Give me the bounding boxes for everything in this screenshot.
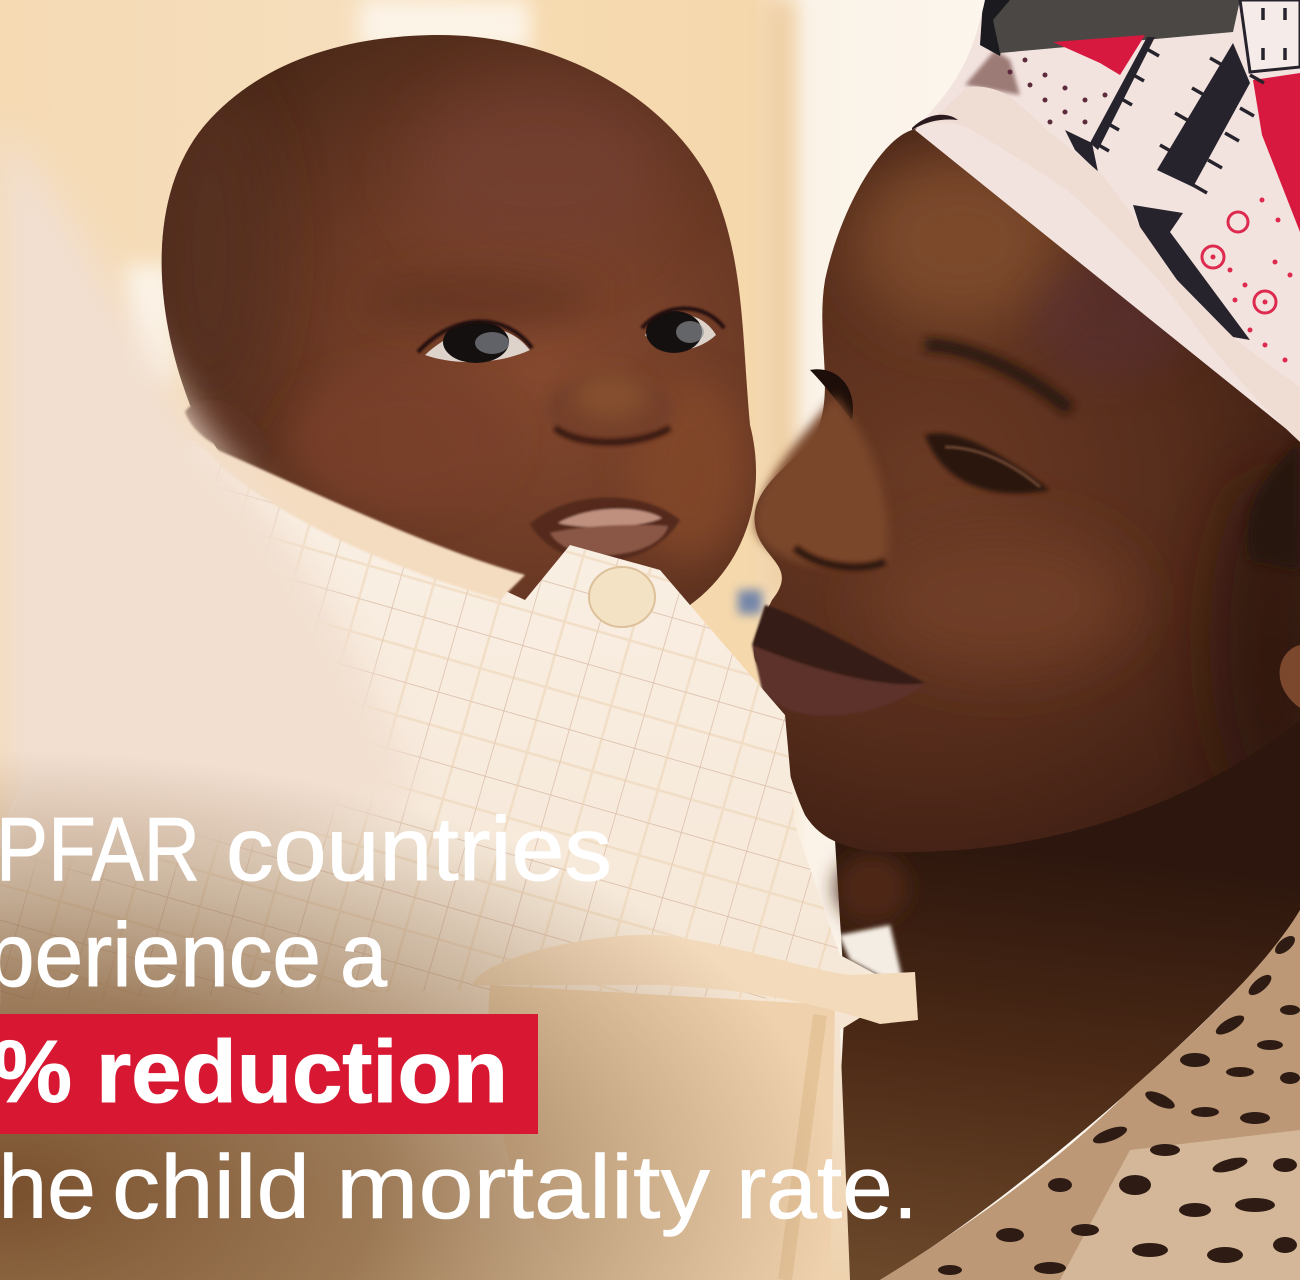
- scarf: black knot behind: [980, 0, 1010, 56]
- carrier strap detail under chin: [836, 854, 908, 922]
- headline line 1: PFAR: [0, 800, 200, 900]
- baby: nose: [546, 374, 674, 446]
- mother: closed eye: [925, 433, 1050, 493]
- headline line 4: mortality: [336, 1138, 710, 1238]
- mother: eyebrow: [925, 345, 1070, 410]
- baby: right eye: [642, 308, 724, 353]
- garment: white ruffle near neck: [825, 905, 905, 990]
- baby: ear: [185, 400, 272, 458]
- baby: mouth: [530, 498, 680, 561]
- scarf: black band at top: [993, 0, 1240, 53]
- headscarf: [900, 0, 1300, 442]
- scarf: red panels: [1053, 35, 1145, 75]
- scarf: pale folded band along forehead: [912, 87, 1300, 442]
- headline line 1: [0, 800, 612, 900]
- garment: pocket flap: [472, 935, 918, 1024]
- scarf: dotted panel: [1008, 58, 1108, 124]
- mother: neck: [830, 700, 1300, 1280]
- mother: lashes of far eye: [810, 369, 853, 420]
- scarf: teeth pattern: [1095, 8, 1285, 193]
- garment: pocket body: [488, 985, 835, 1280]
- headline line 2: a: [340, 906, 388, 1006]
- mother: ear: [1280, 645, 1300, 708]
- headline line 4: rate.: [736, 1138, 918, 1238]
- highlight text: reduction: [96, 1022, 508, 1121]
- garment: button: [589, 567, 655, 627]
- scarf: red ring motifs: [1202, 212, 1276, 313]
- mother: neck and face: [745, 110, 1300, 1280]
- baby: head and face: [162, 35, 756, 605]
- dark shading behind headline: [0, 740, 860, 1280]
- headline line 4: child: [112, 1138, 310, 1238]
- scarf: dark sliver at temple: [912, 115, 958, 130]
- mother: hairline: [1247, 440, 1300, 570]
- mother: lips: [752, 605, 925, 716]
- headline text block: [0, 800, 918, 1238]
- baby: left eye: [418, 321, 532, 363]
- headline line 4: [0, 1138, 918, 1238]
- scarf: pink scribble edge: [965, 50, 1020, 95]
- highlight bar: [0, 1014, 538, 1134]
- baby's garment: soft out-of-focus shoulder: [0, 130, 420, 880]
- baby's garment: plaid cloth: [0, 440, 918, 1280]
- mother's leopard-print blouse: [860, 900, 1300, 1280]
- mother: nose: [755, 395, 888, 567]
- scarf: white block at top right: [1240, 0, 1300, 72]
- headline line 1: countries: [226, 800, 612, 900]
- scarf: black stripes: [1090, 37, 1155, 150]
- scarf: dark corner under dotted panel: [1065, 130, 1098, 172]
- garment: collar band: [195, 440, 525, 600]
